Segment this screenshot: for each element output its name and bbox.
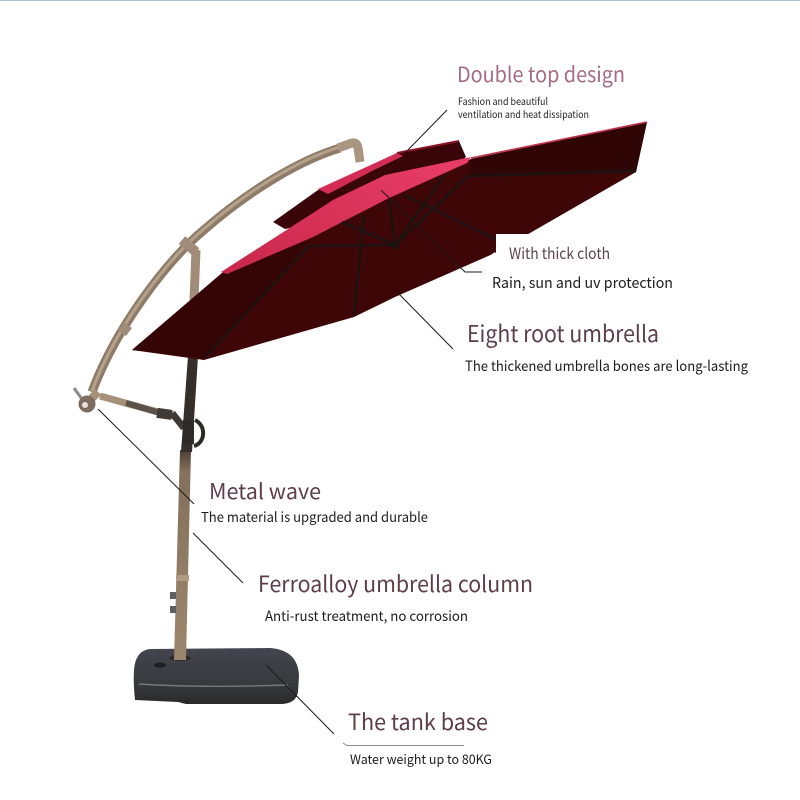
white label backing <box>496 234 626 264</box>
callout: double top design: ventilation and heat dissipation <box>458 106 589 121</box>
callout: double top design <box>457 59 625 121</box>
lower canopy <box>132 122 647 360</box>
callout: metal wave: Metal wave <box>209 475 321 506</box>
tank base <box>134 648 299 704</box>
ribs <box>204 171 636 358</box>
callout: double top design: Double top design <box>457 59 625 89</box>
crank and support strut <box>74 388 203 446</box>
callout: ferroalloy umbrella column <box>258 567 533 626</box>
callout: with thick cloth: Rain, sun and uv protection <box>492 272 673 293</box>
callout: eight root umbrella: Eight root umbrella <box>467 315 659 349</box>
callout: ferroalloy umbrella column: Ferroalloy umbrella column <box>258 567 533 599</box>
callout: with thick cloth <box>492 242 673 293</box>
callout: metal wave: The material is upgraded and durable <box>201 506 428 526</box>
callout: double top design: Fashion and beautiful <box>458 93 548 108</box>
callout: metal wave <box>201 475 428 526</box>
callout: eight root umbrella <box>465 315 748 376</box>
callout: with thick cloth: With thick cloth <box>509 242 610 264</box>
callout: the tank base: Water weight up to 80KG <box>350 749 492 768</box>
leader lines <box>98 110 482 746</box>
callout: the tank base <box>348 705 492 768</box>
callout: the tank base: The tank base <box>348 705 488 737</box>
pink outer band <box>221 157 471 274</box>
callout: eight root umbrella: The thickened umbrella bones are long-lasting <box>465 356 748 376</box>
curved arm <box>92 143 360 392</box>
callout: ferroalloy umbrella column: Anti-rust treatment, no corrosion <box>265 606 468 626</box>
umbrella pole <box>170 356 198 660</box>
upper canopy <box>273 141 466 229</box>
